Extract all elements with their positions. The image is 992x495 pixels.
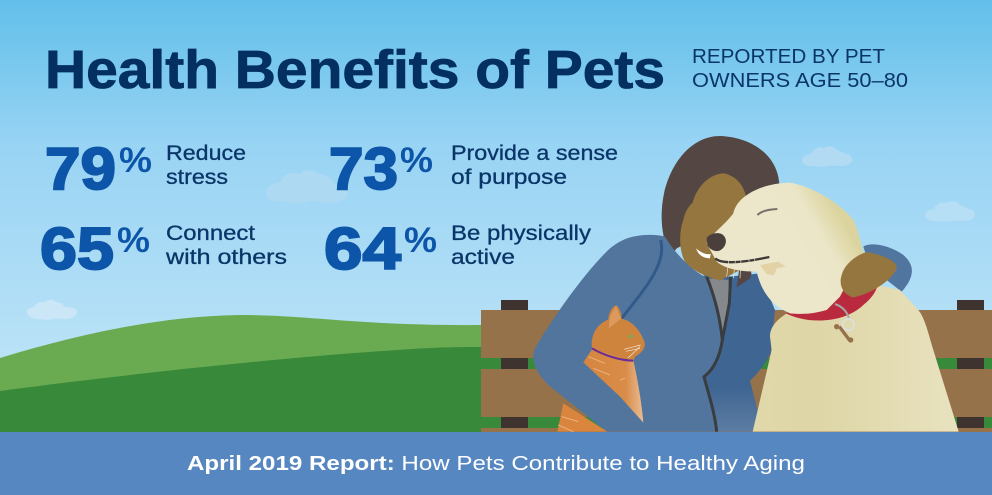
dog collar bbox=[786, 286, 877, 321]
person face bbox=[680, 173, 747, 281]
stat: 73% sense of purpose: 73 bbox=[329, 136, 398, 202]
dog head bbox=[707, 183, 863, 314]
subtitle: REPORTED BY PET bbox=[692, 45, 885, 68]
cat bbox=[557, 305, 645, 432]
hills bbox=[0, 315, 600, 432]
title: Health Benefits of Pets bbox=[45, 40, 665, 100]
stat: 65% connect with others: with others bbox=[165, 246, 287, 269]
stat: 73% sense of purpose bbox=[329, 136, 618, 202]
stat: 65% connect with others: % bbox=[117, 221, 150, 260]
dog body bbox=[753, 285, 959, 432]
stat: 73% sense of purpose: Provide a sense bbox=[451, 142, 618, 165]
footer text: April 2019 Report: How Pets Contribute to Healthy Aging bbox=[187, 452, 805, 475]
stat: 64% physically active: % bbox=[404, 221, 437, 260]
jacket seams bbox=[704, 277, 731, 432]
subtitle bbox=[692, 45, 908, 92]
stat: 64% physically active: Be physically bbox=[451, 222, 592, 245]
person arm and jacket bbox=[533, 235, 722, 432]
stat: 73% sense of purpose: % bbox=[400, 141, 433, 180]
dog nose bbox=[707, 233, 726, 251]
stat: 79% reduce stress bbox=[45, 136, 246, 202]
stat: 79% reduce stress: stress bbox=[166, 166, 228, 189]
stat: 65% connect with others: Connect bbox=[166, 222, 255, 245]
stat: 65% connect with others bbox=[40, 216, 287, 282]
whiskers bbox=[727, 247, 758, 278]
stat: 79% reduce stress: Reduce bbox=[166, 142, 246, 165]
subtitle: OWNERS AGE 50–80 bbox=[692, 69, 908, 92]
person hair bbox=[662, 136, 779, 257]
stat: 65% connect with others: 65 bbox=[40, 216, 114, 282]
stat: 64% physically active bbox=[324, 216, 592, 282]
person's far arm bbox=[863, 244, 912, 292]
dog tag bbox=[834, 304, 854, 343]
footer band bbox=[0, 432, 992, 495]
bench bbox=[481, 300, 992, 432]
dog ear bbox=[841, 252, 897, 297]
stat: 64% physically active: 64 bbox=[324, 216, 401, 282]
stat: 64% physically active: active bbox=[451, 246, 515, 269]
person torso bbox=[653, 273, 775, 432]
dog eye bbox=[757, 209, 777, 215]
shirt bbox=[709, 278, 729, 335]
dog mouth bbox=[715, 257, 769, 262]
illustration: person, cat and dog bbox=[533, 136, 959, 432]
tongue and chin bbox=[696, 248, 711, 258]
stat: 73% sense of purpose: of purpose bbox=[451, 166, 567, 189]
stat: 79% reduce stress: % bbox=[119, 141, 152, 180]
stat: 79% reduce stress: 79 bbox=[45, 136, 116, 202]
clouds bbox=[27, 146, 975, 320]
